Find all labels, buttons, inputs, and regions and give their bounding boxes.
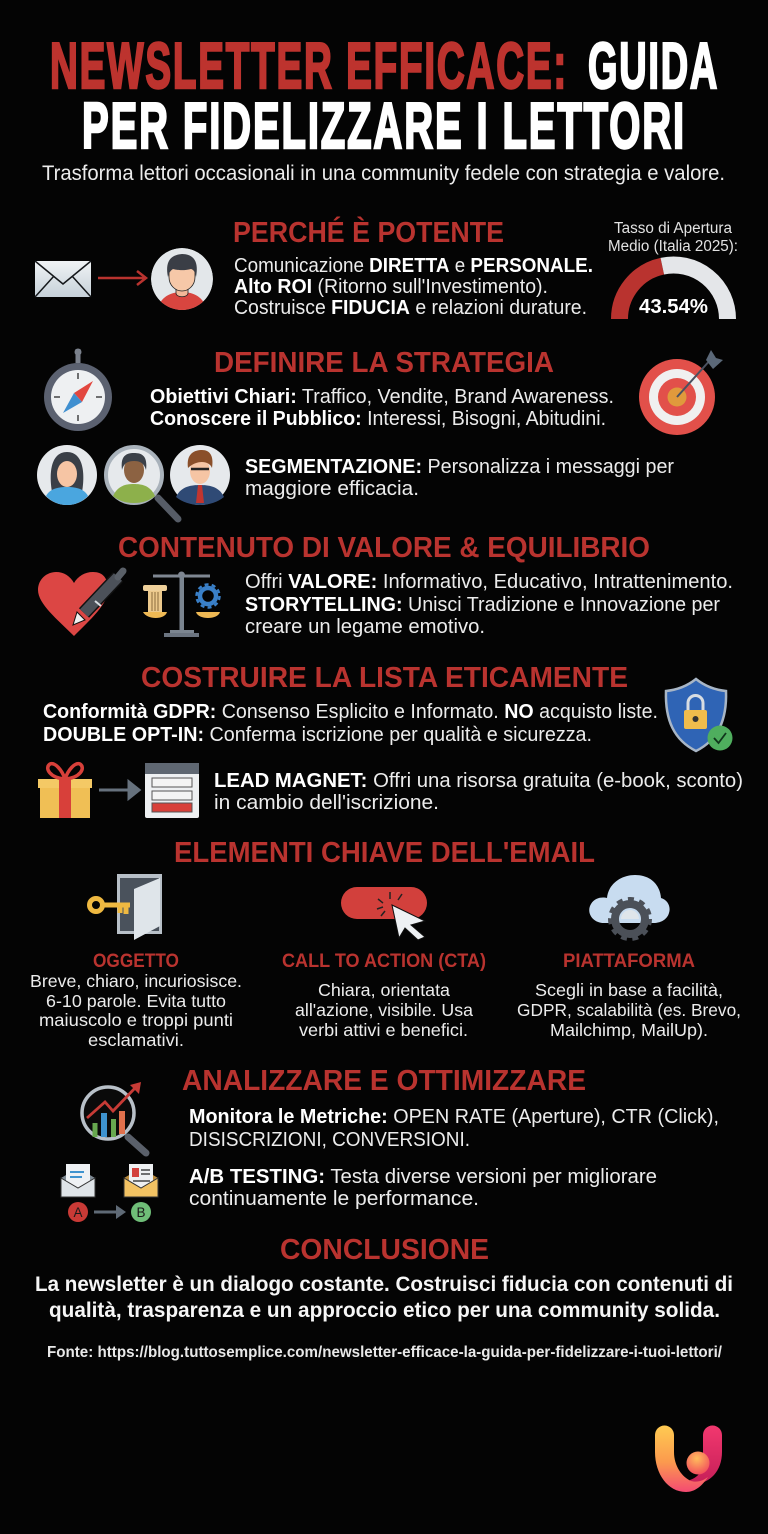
text block <box>189 1105 719 1151</box>
panel: costruire la lista <box>38 662 743 818</box>
text block: Costruisce FIDUCIA e relazioni durature. <box>234 296 587 319</box>
column: piattaforma <box>517 875 741 1040</box>
text block <box>245 455 674 500</box>
arrow <box>99 782 139 798</box>
icon: heart and pen <box>38 571 123 636</box>
text block: LEAD MAGNET: Offri una risorsa gratuita (e-book, sconto) <box>214 769 743 792</box>
gauge chart: 43.54% <box>639 295 708 318</box>
text block: DOUBLE OPT-IN: Conferma iscrizione per qualità e sicurezza. <box>43 723 592 746</box>
gauge chart: Medio (Italia 2025): <box>608 238 738 255</box>
text block: Conformità GDPR: Consenso Esplicito e Informato. NO acquisto liste. <box>43 700 658 723</box>
text block: La newsletter è un dialogo costante. Costruisci fiducia con contenuti di <box>35 1273 733 1296</box>
heading: CONCLUSIONE <box>280 1234 489 1266</box>
text <box>295 980 473 1040</box>
text: GDPR, scalabilità (es. Brevo, <box>517 1000 741 1020</box>
icon: signup form <box>145 763 199 818</box>
heading: ANALIZZARE E OTTIMIZZARE <box>182 1065 586 1097</box>
icon: gift <box>38 764 92 818</box>
text block: Offri VALORE: Informativo, Educativo, Intrattenimento. <box>245 570 733 593</box>
text block: SEGMENTAZIONE: Personalizza i messaggi per <box>245 455 674 478</box>
icon: scales <box>143 572 220 637</box>
text: Breve, chiaro, incuriosisce. <box>30 971 242 991</box>
icon: audience segments <box>37 445 230 519</box>
heading: ELEMENTI CHIAVE DELL'EMAIL <box>174 837 595 869</box>
icon: envelope <box>35 261 91 297</box>
text block: Obiettivi Chiari: Traffico, Vendite, Brand Awareness. <box>150 385 614 408</box>
icon: cloud and gear <box>589 875 670 939</box>
text block <box>35 1273 733 1322</box>
panel: elementi chiave <box>30 837 741 1050</box>
icon: compass <box>44 348 112 431</box>
icon: A/B envelopes: A <box>73 1205 83 1220</box>
icon: A/B envelopes: B <box>136 1205 146 1220</box>
icon: logo <box>655 1426 722 1492</box>
text block <box>150 385 614 430</box>
icon: target <box>639 350 723 435</box>
text block: qualità, trasparenza e un approccio etico per una community solida. <box>49 1299 720 1322</box>
text block: A/B TESTING: Testa diverse versioni per migliorare <box>189 1165 657 1188</box>
panel: contenuto di valore <box>38 532 733 638</box>
text: verbi attivi e benefici. <box>299 1020 468 1040</box>
heading: PERCHÉ È POTENTE <box>233 215 504 249</box>
source: Fonte: https://blog.tuttosemplice.com/newsletter-efficace-la-guida-per-fidelizzare-i-tuoi-lettori/ <box>47 1344 723 1361</box>
icon: A/B envelopes <box>61 1164 158 1222</box>
text block: continuamente le performance. <box>189 1187 479 1210</box>
gauge chart: Tasso di Apertura <box>614 220 732 237</box>
text block: Monitora le Metriche: OPEN RATE (Aperture), CTR (Click), <box>189 1105 719 1128</box>
panel: analizzare e ottimizzare <box>61 1065 719 1222</box>
text block <box>43 700 658 746</box>
text: Mailchimp, MailUp). <box>550 1020 708 1040</box>
text: esclamativi. <box>88 1030 184 1050</box>
subtitle: Trasforma lettori occasionali in una community fedele con strategia e valore. <box>42 161 725 185</box>
gauge chart <box>608 220 738 319</box>
text block: Alto ROI (Ritorno sull'Investimento). <box>234 275 548 298</box>
heading: COSTRUIRE LA LISTA ETICAMENTE <box>141 662 628 694</box>
panel: definire la strategia <box>37 347 723 519</box>
text block: Comunicazione DIRETTA e PERSONALE. <box>234 254 593 277</box>
text: Chiara, orientata <box>318 980 450 1000</box>
heading: DEFINIRE LA STRATEGIA <box>214 347 554 379</box>
icon: shield <box>666 679 732 751</box>
label: CALL TO ACTION (CTA) <box>282 951 486 972</box>
text block: Conoscere il Pubblico: Interessi, Bisogni, Abitudini. <box>150 407 606 430</box>
text: all'azione, visibile. Usa <box>295 1000 473 1020</box>
text block: maggiore efficacia. <box>245 477 419 500</box>
text <box>517 980 741 1040</box>
text block: DISISCRIZIONI, CONVERSIONI. <box>189 1128 470 1151</box>
text <box>30 971 242 1050</box>
title <box>50 29 719 162</box>
icon: button and cursor <box>341 887 427 940</box>
text block: in cambio dell'iscrizione. <box>214 791 439 814</box>
icon: analytics magnifier <box>82 1082 146 1153</box>
arrow <box>98 271 146 285</box>
icon: key and door <box>90 874 162 940</box>
text block <box>214 769 743 814</box>
text block <box>234 254 593 319</box>
text: maiuscolo e troppi punti <box>39 1010 233 1030</box>
icon: person <box>151 248 213 312</box>
text: Scegli in base a facilità, <box>535 980 723 1000</box>
panel: conclusione <box>35 1234 733 1322</box>
column: oggetto <box>30 874 242 1050</box>
text block: STORYTELLING: Unisci Tradizione e Innovazione per <box>245 593 720 616</box>
heading: CONTENUTO DI VALORE & EQUILIBRIO <box>118 532 650 564</box>
column: call to action <box>282 887 486 1040</box>
text block <box>189 1165 657 1210</box>
text block <box>245 570 733 638</box>
panel: perché è potente <box>35 215 738 319</box>
label: PIATTAFORMA <box>563 951 695 972</box>
text block: creare un legame emotivo. <box>245 615 485 638</box>
text: 6-10 parole. Evita tutto <box>46 991 226 1011</box>
label: OGGETTO <box>93 951 179 972</box>
